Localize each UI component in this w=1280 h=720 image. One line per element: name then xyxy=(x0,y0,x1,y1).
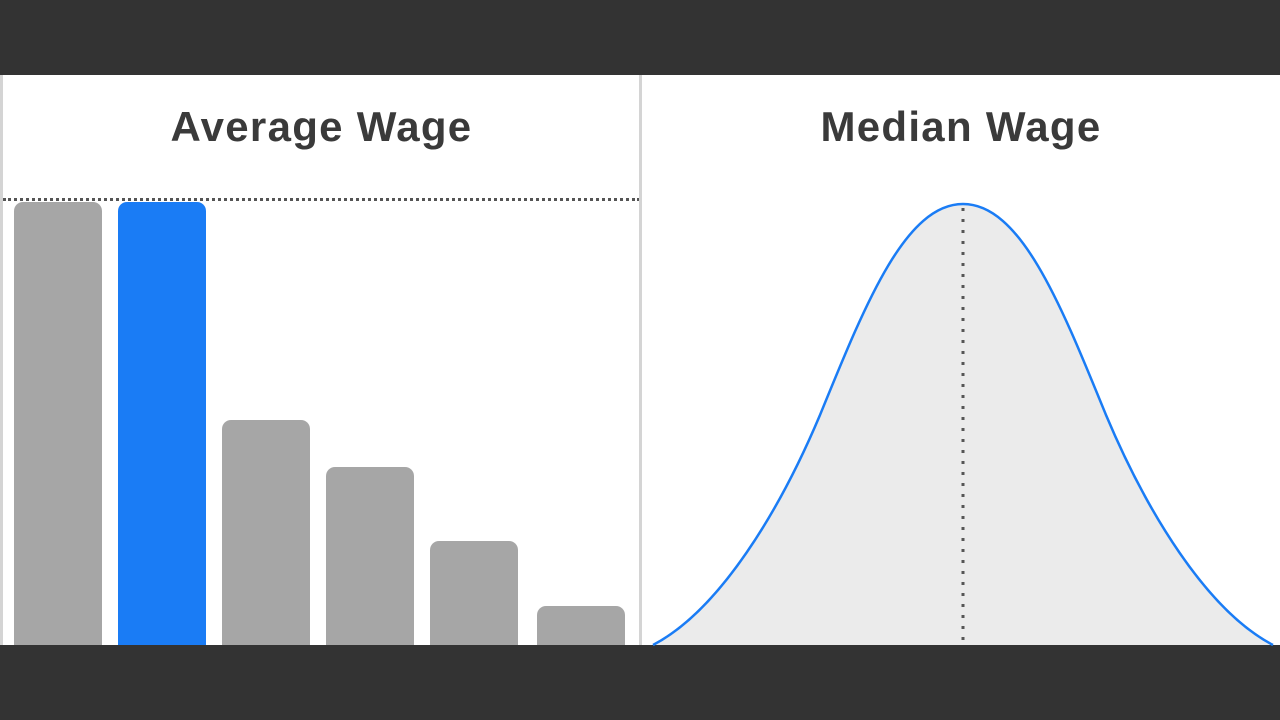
median dotted line xyxy=(962,208,964,645)
bar 3 xyxy=(222,420,310,645)
bar 1 xyxy=(14,202,102,645)
heading: Median Wage: Median Wage xyxy=(820,103,1102,150)
bar 2 highlighted xyxy=(118,202,206,645)
panel: median wage xyxy=(642,75,1280,645)
divider xyxy=(639,75,642,645)
heading: Average Wage: Average Wage xyxy=(171,103,472,150)
dotted average line xyxy=(3,198,640,201)
bar 4 xyxy=(326,467,414,645)
bar 6 xyxy=(537,606,625,645)
bell curve xyxy=(653,204,1273,645)
bar 5 xyxy=(430,541,518,645)
panel: average wage xyxy=(0,75,640,645)
